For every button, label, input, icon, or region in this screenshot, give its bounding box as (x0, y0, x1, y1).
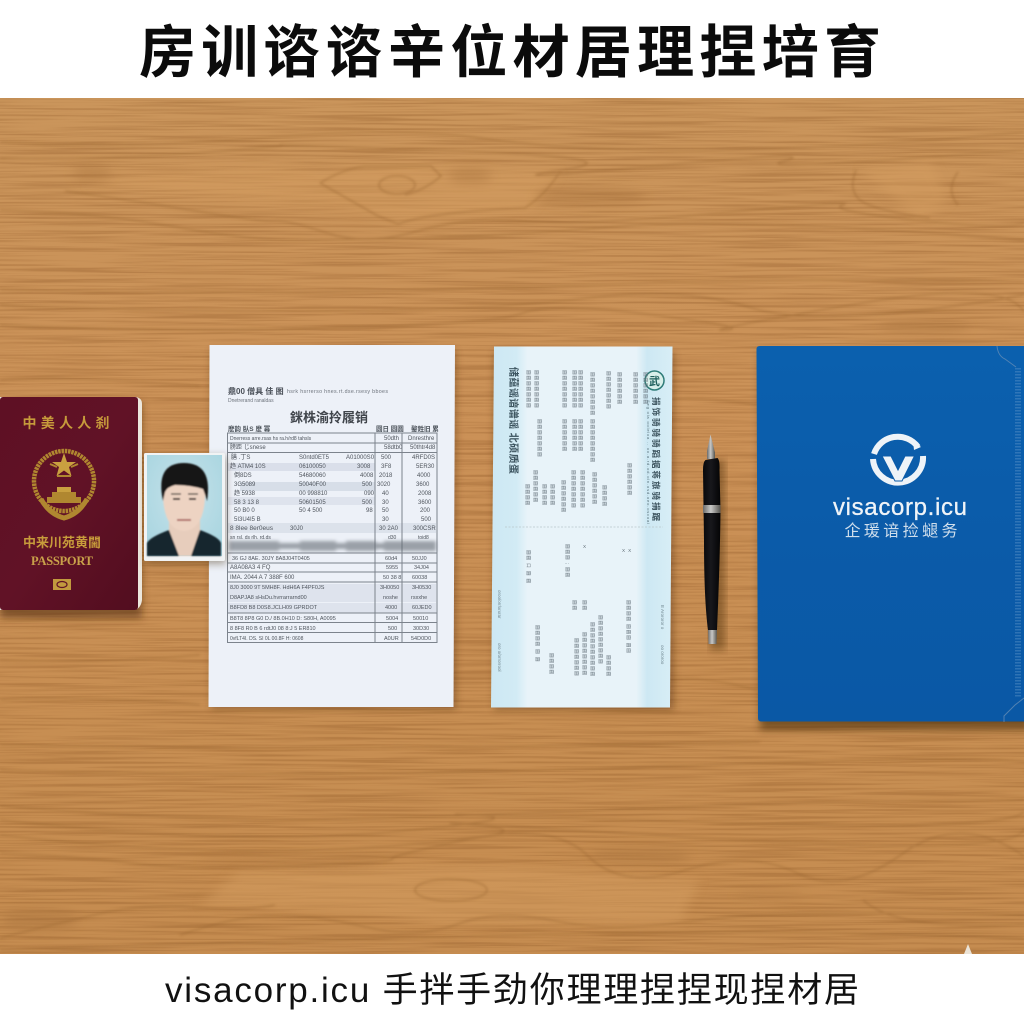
table row text: 98 (366, 508, 373, 514)
table row text: 5I3U4I5 B (234, 517, 261, 523)
slip emblem: 武 (649, 375, 660, 388)
folder notch and seam (997, 346, 1024, 722)
table row text: 5004 (386, 616, 398, 622)
table row text: 4000 (385, 605, 397, 611)
statement header: 鼎00 僧具 佳 图 (228, 386, 284, 396)
passport (0, 397, 142, 618)
table row text: 倒8DS (234, 471, 252, 479)
table row text: d30 (388, 535, 397, 541)
slip lower columns: 圆圆圆圆 (548, 653, 554, 675)
blurred table band (229, 541, 436, 551)
table row text: 500 (421, 517, 432, 523)
slip upper columns: 圆圆圆圆圆圆 (642, 372, 648, 405)
blue folder (756, 346, 1024, 730)
slip lower fine print: oroo/orr/xrxrar (497, 590, 502, 619)
footer small mark (964, 944, 972, 954)
table row text: 60038 (412, 575, 427, 581)
table row text: 36 GJ 8AE. 30JY 8A8J04T0405 (232, 556, 310, 562)
table row text: 4000 (417, 473, 431, 479)
pen nib (707, 434, 715, 459)
table row text: 34J04 (414, 565, 429, 571)
slip lower fine print: oro o/orrorrool (497, 643, 502, 672)
statement column headers: 鏊鉎旧 累 (411, 424, 439, 433)
table row text: 8J0 3000 9T 5MH8F. HdH6A F4PF0JS (230, 585, 325, 591)
folder subtitle: 企瑗谙捡螁务 (844, 522, 958, 540)
table row text: rsxxhe (411, 595, 427, 601)
table row text: 50 B0 0 (234, 508, 255, 514)
slip lower fine print: E Arororor o (660, 605, 665, 630)
passport subtitle: 中来川苑黄閫 (23, 535, 101, 550)
slip lower fine print (497, 590, 665, 672)
statement header: Dnetrerand ranaldas (228, 398, 274, 404)
slip upper columns: 圆圆圆圆圆圆 (632, 372, 638, 405)
slip lower fine print: oo ororoo (660, 645, 665, 665)
table row text: 00 998810 (299, 491, 328, 497)
table row text: 200 (420, 508, 431, 514)
slip upper columns: 圆圆圆圆圆圆圆 (570, 470, 576, 508)
slip lower columns: 圆圆 (581, 600, 587, 611)
table row text: 50601505 (299, 500, 326, 506)
table row text: 40 (382, 491, 389, 497)
table row text: 4008 (360, 473, 374, 479)
slip upper columns: 圆圆圆圆圆圆圆 (571, 370, 577, 408)
slip upper columns: 圆圆圆圆 (549, 484, 555, 506)
pen band (703, 505, 720, 513)
logo: V in circular arrow (873, 437, 923, 483)
table row text: noshe (383, 595, 398, 601)
pen end cap (708, 630, 717, 644)
table row text: 0vfLT4I. DS. SI 0L 00.8F H: 0608 (230, 636, 304, 642)
pen (703, 434, 725, 650)
table row text: A8A08A3 4 FQ (230, 565, 271, 571)
slip upper columns: 圆圆圆圆 (541, 484, 547, 506)
folder brand: visacorp.icu (833, 494, 967, 521)
slip vertical heading: 储蕴谣谙谱谣 北硕质蛋 (507, 367, 520, 474)
table row text: 8 8lee 8er0eus (230, 525, 274, 532)
slip upper columns: 圆圆圆圆圆圆圆 (536, 419, 542, 457)
table row text: 5ER30 (416, 464, 435, 470)
passport emblem (34, 451, 94, 518)
table row text: 3600 (418, 500, 432, 506)
slip upper columns: 圆圆圆圆圆圆圆 (533, 370, 539, 408)
table row text: 50dth (384, 436, 399, 442)
table row text: 50thtr4d8 (410, 445, 436, 451)
slip upper columns: 圆圆圆圆圆圆圆圆 (589, 419, 595, 463)
table row text: 60d4 (385, 556, 397, 562)
table row text: 300CSR (413, 526, 436, 532)
table row text: 3H0050 (380, 585, 399, 591)
slip lower columns: 圆圆圆圆 圆圆圆 圆圆 (625, 600, 631, 654)
table row text: 3G5089 (234, 482, 256, 488)
slip upper columns: 圆圆圆圆圆圆 (560, 480, 566, 513)
slip lower columns: 圆圆圆圆圆圆圆 (573, 638, 579, 676)
slip upper columns: 圆圆圆圆圆圆圆 (579, 470, 585, 508)
slip lower columns: 圆圆圆圆圆圆圆圆圆 (597, 615, 603, 664)
slip fold line (505, 526, 663, 528)
table row text: 30D30 (413, 626, 429, 632)
table row text: 54D0D0 (411, 636, 431, 642)
table row text: 500 (362, 500, 373, 506)
slip upper columns: 圆圆圆圆圆圆 (571, 419, 577, 452)
table row text: 50 (382, 508, 389, 514)
slip right heading: 捐饰骑骑骑蹈据蒋旅骑捐踞 (651, 397, 661, 521)
table row text: 趋 ATM4 10S (230, 462, 266, 470)
table row text: A0UR (384, 636, 399, 642)
table row text: 30 (382, 517, 389, 523)
statement column headers: 圆日 圆圆 (376, 425, 404, 433)
slip lower columns (525, 544, 632, 677)
table row text: 500 (381, 455, 392, 461)
slip lower columns: X (583, 544, 587, 549)
table row text: 58 3 13 8 (234, 500, 260, 506)
slip upper columns: 圆圆圆圆圆圆 (616, 372, 622, 405)
footer banner (0, 944, 1024, 1024)
biometric chip icon (53, 579, 71, 590)
table row text: 50JJ0 (412, 556, 427, 562)
document: bank statement (0, 345, 1024, 1024)
table row text: 30J0 (290, 526, 304, 532)
slip upper columns: 圆圆圆圆 (524, 484, 530, 506)
slip lower columns: 圆圆圆圆 圆 圆 (534, 625, 540, 662)
statement title: 銤株渝拎履销 (290, 410, 368, 425)
slip upper columns: 圆圆圆圆圆圆 (577, 419, 583, 452)
slip upper columns: 圆圆圆圆圆圆 (626, 463, 632, 496)
slip upper columns: 圆圆圆圆圆圆 (591, 472, 597, 505)
table row text: 60JED0 (412, 605, 432, 611)
table row text: Dnerress arre.rsas hs ra.h/rd8 tahsls (230, 436, 312, 442)
table row text: 50 4 500 (299, 508, 323, 514)
slip lower columns: 圆圆 口 圆 圆 (525, 550, 531, 584)
footer caption: visacorp.icu 手拌手劲你理理捏捏现捏材居 (165, 971, 859, 1010)
shoulders (147, 530, 221, 556)
table row text: IMA. 2044 A 7 388F 600 (230, 575, 295, 581)
table row text: 3008 (357, 464, 371, 470)
eyes and brows (171, 493, 198, 495)
neck and collar (169, 510, 200, 556)
pen body (703, 458, 720, 630)
slip lower columns: 圆圆圆圆 (605, 655, 611, 677)
slip lower columns: X X (622, 548, 632, 553)
table row text: sn rsl. ds rlh. rd.ds (230, 535, 271, 541)
slip emblem (645, 371, 664, 390)
statement column headers (228, 424, 439, 433)
statement table (228, 433, 437, 642)
slip upper columns: 圆圆圆圆 (601, 485, 607, 507)
slip upper columns: 圆圆圆圆圆圆圆 (605, 371, 611, 409)
table row text (230, 436, 436, 642)
table row text: 58dtb0 (384, 445, 403, 451)
slip upper columns: 圆圆圆圆圆圆圆 (525, 370, 531, 408)
table row text: 膀距 じsnese (230, 443, 266, 451)
hair (161, 463, 208, 501)
table row text: 06100050 (299, 464, 326, 470)
table row text: 8 8F8 R0 B 6 rdtJ0 08 8:J 5 ER810 (230, 626, 316, 632)
table row text: 500 (388, 626, 397, 632)
slip upper columns: 圆圆圆圆圆圆 (532, 470, 538, 503)
passport label: PASSPORT (31, 554, 94, 568)
face (163, 480, 205, 531)
table row text: B8T8 8P8 G0 D./ 8B.0H10 D: S80H, A0095 (230, 616, 336, 622)
table row text: 50010 (413, 616, 428, 622)
table row text: 2008 (418, 491, 432, 497)
title banner (0, 0, 1024, 98)
slip lower columns: 圆圆圆 ; 圆圆 (564, 544, 570, 578)
slip lower columns: 圆圆圆圆圆圆圆圆 (581, 632, 587, 676)
table row text: 5955 (386, 565, 398, 571)
slip upper columns: 圆圆圆圆圆圆圆圆 (589, 372, 595, 416)
table row text: 趋 5938 (234, 489, 256, 497)
table row text: toid8 (418, 535, 429, 541)
table row text: D8APJA8 sHsDu.hvrrarrarnd00 (230, 595, 307, 601)
statement header (228, 386, 388, 404)
table row text: 2018 (379, 473, 393, 479)
slip lower columns: 圆圆 (571, 600, 577, 611)
payment slip (491, 346, 674, 710)
table row text: 090 (364, 491, 375, 497)
slip right fine print: Seg ola oolelxa .. xo.a.rd.od.oln.osd.oeo.oscoal (646, 400, 651, 524)
passport heading: 中美人人刹 (22, 415, 110, 431)
table row text: S0ntd0ET5 (299, 455, 330, 461)
table row text: 30 2A0 (379, 526, 399, 532)
slip upper columns: 圆圆圆圆圆圆圆 (561, 370, 567, 408)
table row text: 4RFD0S (412, 455, 435, 461)
table row text: 3F8 (381, 464, 392, 470)
table row text: B8FD8 B8 D0S8.JCLH09 GPRDOT (230, 605, 318, 611)
table row text: 3600 (416, 482, 430, 488)
table row text: 3020 (377, 482, 391, 488)
table row text: 50 38 8 (383, 575, 401, 581)
slip lower columns: 圆圆圆圆圆圆圆圆圆圆 (589, 622, 595, 677)
slip upper columns: 圆圆圆圆圆圆 (561, 419, 567, 452)
table row text: 500 (362, 482, 373, 488)
table row text: 膳 .丁S (231, 453, 250, 461)
table row text: A01000S0 (346, 455, 375, 461)
statement column headers: 麽韵 臥S 麽 冪 (228, 424, 271, 433)
table row text: 54680060 (299, 473, 326, 479)
ID photo (144, 453, 226, 564)
statement header: hsrk hsrrerso hnes.rt.dse.rsesy bboes (287, 389, 388, 395)
table row text: 30 (382, 500, 389, 506)
table row text: 50040F00 (299, 482, 327, 488)
mouth (177, 519, 191, 521)
slip upper columns (524, 370, 648, 513)
title: 房训谘谘辛位材居理捏培育 (139, 21, 881, 85)
table row text: 3H0530 (412, 585, 431, 591)
slip upper columns: 圆圆圆圆圆圆圆 (577, 370, 583, 408)
table row text: Dnresthre (408, 436, 435, 442)
